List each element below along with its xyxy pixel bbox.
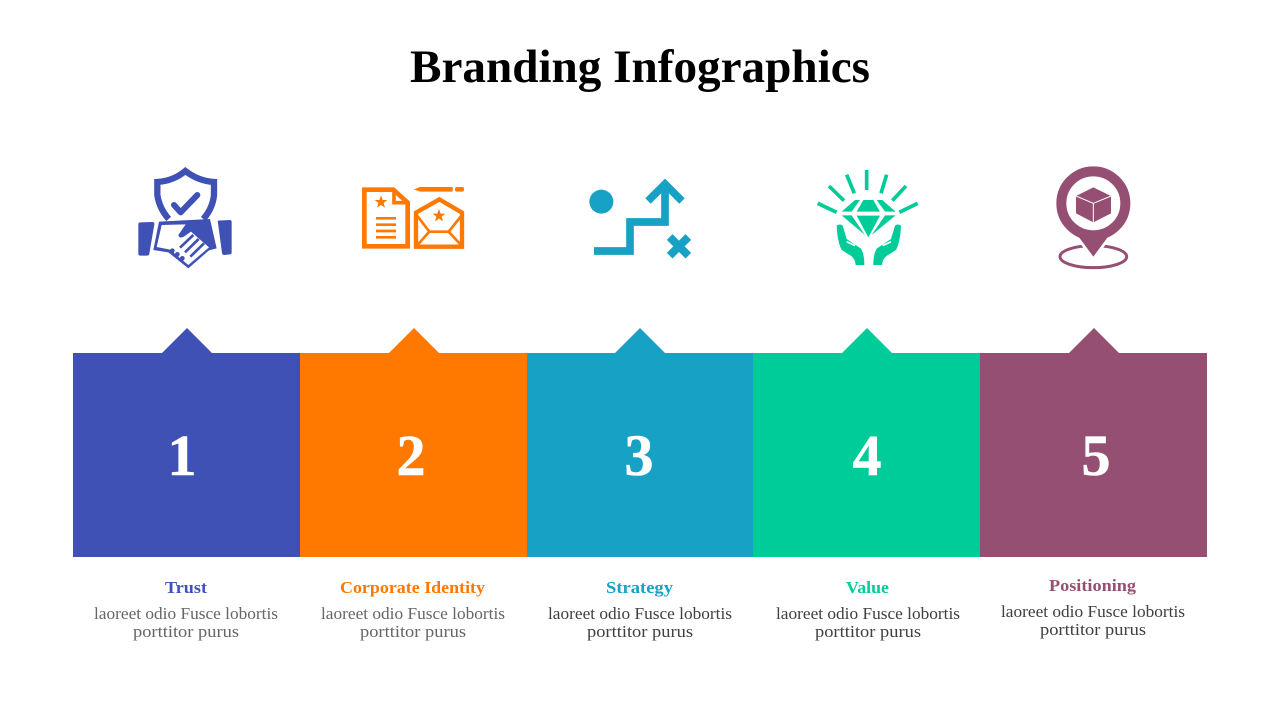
label: Positioning: Positioning xyxy=(1049,576,1137,595)
number 2: 2 xyxy=(396,423,426,488)
caption: Value xyxy=(776,578,960,641)
shield with check mark xyxy=(157,171,214,219)
icon: diamond in hands xyxy=(818,170,918,265)
description: Value: porttitor purus xyxy=(815,622,921,641)
icon: strategy stairs xyxy=(589,184,688,256)
label: Value: Value xyxy=(846,578,889,597)
description: Trust: porttitor purus xyxy=(133,622,239,641)
description: Corporate Identity: laoreet odio Fusce lobortis xyxy=(321,604,505,623)
caption: Strategy xyxy=(548,578,732,641)
number 1: 1 xyxy=(168,423,196,488)
label: Corporate Identity: Corporate Identity xyxy=(340,578,486,597)
description: Positioning xyxy=(1001,602,1185,639)
panel 1: blue block xyxy=(73,328,300,557)
description: Value: laoreet odio Fusce lobortis xyxy=(776,604,960,623)
description: Positioning: porttitor purus xyxy=(1040,620,1146,639)
description: Corporate Identity: porttitor purus xyxy=(360,622,466,641)
title: Branding Infographics xyxy=(410,41,870,93)
caption: Corporate Identity xyxy=(321,578,505,641)
description: Positioning: laoreet odio Fusce lobortis xyxy=(1001,602,1185,621)
description: Value xyxy=(776,604,960,641)
description: Corporate Identity xyxy=(321,604,505,641)
panel 5: mauve block xyxy=(980,328,1207,557)
caption: Trust xyxy=(94,578,278,641)
cupped hands xyxy=(837,224,901,265)
panel 2: orange block xyxy=(300,328,527,557)
handshake xyxy=(138,219,232,268)
label: Trust: Trust xyxy=(165,578,208,597)
panel 3: teal block xyxy=(527,328,753,557)
description: Trust: laoreet odio Fusce lobortis xyxy=(94,604,278,623)
description: Strategy: porttitor purus xyxy=(587,622,693,641)
description: Trust xyxy=(94,604,278,641)
panel 4: green block xyxy=(753,328,980,557)
number 3: 3 xyxy=(624,423,654,488)
label: Strategy: Strategy xyxy=(606,578,674,597)
number 4: 4 xyxy=(852,423,882,488)
number 5: 5 xyxy=(1082,423,1110,488)
caption: Positioning xyxy=(1001,576,1185,639)
icon: location pin with cube xyxy=(1060,171,1127,268)
description: Strategy: laoreet odio Fusce lobortis xyxy=(548,604,732,623)
icon: document and envelope xyxy=(364,187,464,247)
description: Strategy xyxy=(548,604,732,641)
diamond with rays xyxy=(818,170,918,237)
icon: shield and handshake xyxy=(138,171,232,268)
